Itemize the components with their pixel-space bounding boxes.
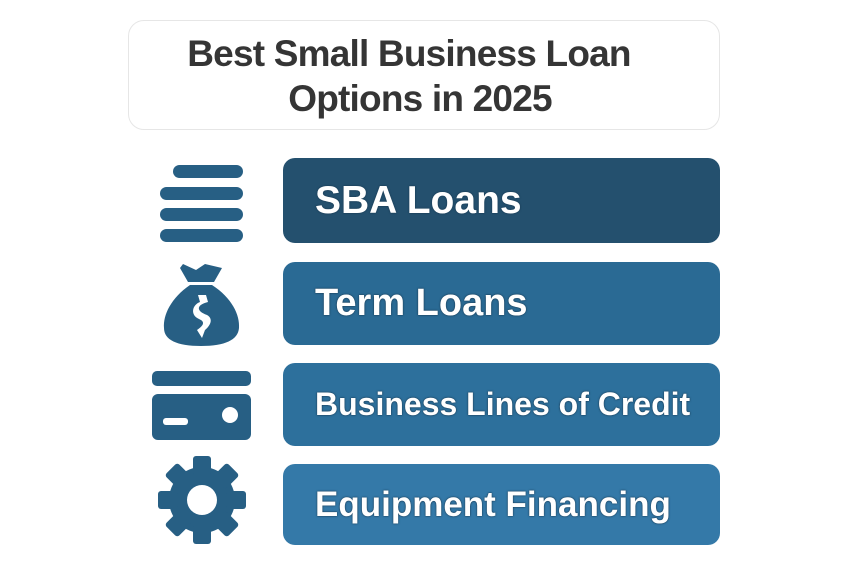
icon: stacked lines xyxy=(160,165,243,242)
icon: credit card xyxy=(152,371,251,440)
panel: Equipment Financing xyxy=(283,464,720,545)
panel: Business Lines of Credit xyxy=(283,363,720,446)
title xyxy=(128,20,720,130)
panel: SBA Loans xyxy=(283,158,720,243)
panel: SBA Loans: SBA Loans xyxy=(315,178,522,222)
panel: Equipment Financing: Equipment Financing xyxy=(315,484,671,524)
panel: Term Loans: Term Loans xyxy=(315,282,528,324)
panel: Term Loans xyxy=(283,262,720,345)
icon: money bag xyxy=(164,264,239,346)
icon: gear xyxy=(158,456,246,544)
title: Options in 2025 xyxy=(288,78,552,119)
panel: Business Lines of Credit: Business Lines of Credit xyxy=(315,386,690,422)
title: Best Small Business Loan xyxy=(187,33,631,74)
